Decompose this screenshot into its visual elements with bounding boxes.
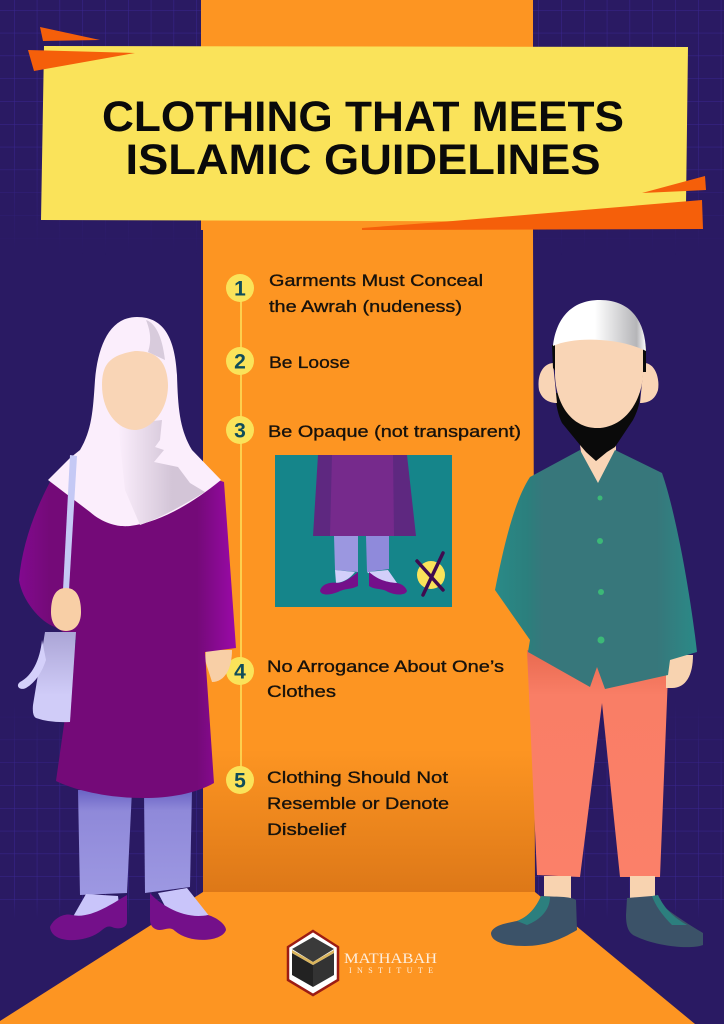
right shoe xyxy=(626,896,703,947)
title second line: ISLAMIC GUIDELINES xyxy=(126,136,600,184)
banner accent right top xyxy=(642,176,706,193)
ears xyxy=(539,363,658,403)
hijab xyxy=(48,317,221,526)
logo: INSTITUTE xyxy=(349,966,433,975)
hexagon mark xyxy=(288,931,338,995)
icon: crossed circle xyxy=(417,553,445,595)
logo xyxy=(288,931,437,995)
guideline 2: 2 xyxy=(234,350,246,374)
guideline 5: Resemble or Denote xyxy=(267,794,449,813)
cap xyxy=(553,300,646,351)
face xyxy=(555,335,643,428)
face xyxy=(102,351,168,430)
hijab shadow xyxy=(118,420,205,525)
guideline 4: 4 xyxy=(234,660,246,684)
guideline 4 xyxy=(226,657,504,701)
woman figure xyxy=(18,317,236,940)
dress xyxy=(19,460,236,798)
banner accent right bottom xyxy=(362,200,703,230)
left shoe xyxy=(50,895,127,940)
left shoe xyxy=(491,896,577,946)
banner accent top xyxy=(40,27,100,41)
left shoe collar xyxy=(517,896,550,925)
beard xyxy=(555,393,640,461)
socks xyxy=(70,888,210,925)
center orange stripe xyxy=(201,0,535,892)
guideline 5: Clothing Should Not xyxy=(267,768,448,787)
ankles xyxy=(544,876,655,900)
floor xyxy=(0,892,695,1024)
guideline 3: 3 xyxy=(234,420,246,442)
guideline 1: the Awrah (nudeness) xyxy=(269,297,462,316)
guideline 4: No Arrogance About One’s xyxy=(267,657,504,676)
buttons xyxy=(597,496,604,644)
shoes xyxy=(320,572,358,594)
trouser legs xyxy=(334,536,358,572)
banner accent left xyxy=(28,50,135,71)
guideline 5 xyxy=(226,766,449,839)
guideline 2: Be Loose xyxy=(269,353,350,372)
right shoe collar xyxy=(652,895,687,925)
guideline 3 xyxy=(226,416,521,444)
banner background xyxy=(41,46,688,222)
right hand xyxy=(666,655,693,688)
title: CLOTHING THAT MEETS xyxy=(102,93,624,141)
right hand xyxy=(205,650,232,682)
neck xyxy=(580,445,616,485)
handbag xyxy=(18,632,76,722)
man figure xyxy=(491,300,703,947)
guideline 4: Clothes xyxy=(267,682,336,701)
guideline 2 xyxy=(226,347,350,375)
shirt xyxy=(495,450,697,689)
guideline 1: 1 xyxy=(234,278,246,300)
guideline 3: Be Opaque (not transparent) xyxy=(268,422,521,441)
wordmark: MATHABAH xyxy=(344,951,437,967)
legs xyxy=(78,790,132,895)
hijab upper shadow xyxy=(146,320,165,360)
right shoe xyxy=(150,893,226,940)
guideline 5: 5 xyxy=(234,770,246,792)
socks xyxy=(335,570,397,583)
guideline 1 xyxy=(226,271,483,316)
left hand xyxy=(51,588,81,631)
hair sides xyxy=(552,345,646,372)
timeline line xyxy=(240,288,242,780)
bag strap xyxy=(63,455,77,590)
guideline 1: Garments Must Conceal xyxy=(269,271,483,290)
skirt xyxy=(313,455,416,536)
trousers xyxy=(527,650,669,877)
guideline 5: Disbelief xyxy=(267,820,346,839)
illustration panel: opaque garment xyxy=(275,455,452,607)
title banner xyxy=(28,27,706,230)
